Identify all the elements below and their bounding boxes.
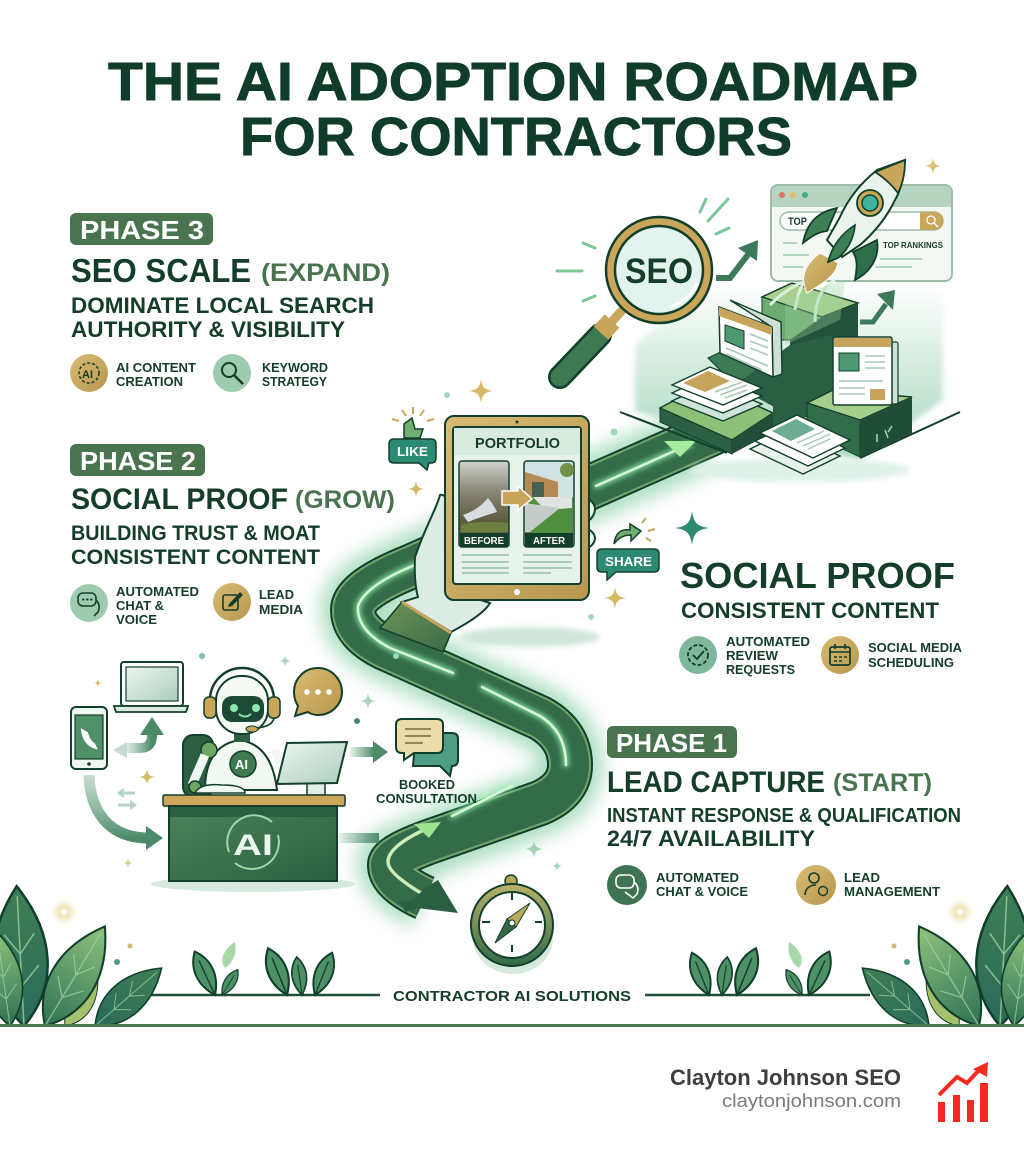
- label: automated review requests: AUTOMATED: [726, 634, 810, 649]
- panel: social proof text: [680, 555, 955, 623]
- label: AI content creation: CREATION: [116, 374, 183, 389]
- label: automated review requests: [726, 634, 810, 677]
- bottom divider band: [0, 1024, 1024, 1027]
- label: automated chat and voice: CHAT &: [116, 598, 164, 613]
- icon: SEO magnifying glass: [560, 217, 712, 377]
- arrow: phone to desk: [89, 775, 163, 850]
- footer: brand text: claytonjohnson.com: [722, 1090, 901, 1111]
- icon: like bubble: [389, 407, 436, 470]
- panel: phase 3 text: DOMINATE LOCAL SEARCH: [71, 293, 374, 318]
- label: AI content creation: [116, 360, 196, 389]
- arrow: growth arrow right: [860, 290, 895, 322]
- arrow: desk to road: [339, 833, 379, 843]
- icon: browser window with top rankings: TOP RANKINGS: [883, 240, 943, 250]
- label: automated chat and voice: [116, 584, 199, 627]
- label: automated chat and voice: AUTOMATED: [116, 584, 199, 599]
- arrow: small exchange arrows: [117, 788, 137, 810]
- panel: phase 3 text: PHASE 3: [80, 215, 204, 245]
- leaves left: [0, 885, 173, 1039]
- icon: gold sparkles near tablet: [408, 379, 626, 609]
- icon: portfolio hand: [402, 495, 595, 632]
- label: contractor AI solutions: CONTRACTOR AI SOLUTIONS: [393, 988, 631, 1005]
- icon: browser window with top rankings: TOP: [788, 216, 807, 228]
- label: lead management: LEAD: [844, 870, 880, 885]
- footer: red chart logo: [938, 1062, 988, 1122]
- decorative robot sparkles: [94, 653, 376, 868]
- panel: social proof text: CONSISTENT CONTENT: [681, 598, 940, 623]
- title: [108, 52, 918, 167]
- icon: sparkle top right: [925, 158, 941, 174]
- label: booked consultation: BOOKED: [399, 777, 455, 792]
- panel: SEO isometric staircase: [620, 283, 960, 482]
- after photo: [524, 461, 574, 547]
- icon: consultation chat bubbles: [396, 719, 458, 776]
- icon: paper stack left: [672, 367, 762, 421]
- panel: phase 3 text: [70, 213, 390, 342]
- panel: phase 1 text: [607, 726, 961, 851]
- icon: gold speech bubble: [294, 668, 342, 716]
- panel: social proof text: SOCIAL PROOF: [680, 555, 955, 596]
- title: THE AI ADOPTION ROADMAP: [108, 52, 918, 112]
- label: lead media: MEDIA: [259, 602, 304, 617]
- panel: portfolio tablet: [445, 416, 600, 647]
- icon: paper stack right: [750, 415, 850, 474]
- label: lead media: [259, 587, 304, 617]
- panel: phase 1 text: PHASE 1: [616, 728, 727, 758]
- icon: share bubble: SHARE: [605, 555, 652, 569]
- footer: brand text: Clayton Johnson SEO: [670, 1065, 901, 1090]
- robot head: [204, 668, 280, 734]
- label: keyword strategy: STRATEGY: [262, 374, 327, 389]
- road path winding from compass to SEO: [353, 432, 715, 898]
- panel: phase 2 text: BUILDING TRUST & MOAT: [71, 522, 320, 545]
- panel: phase 1 text: INSTANT RESPONSE & QUALIFICATION: [607, 805, 961, 827]
- label: automated review requests: REQUESTS: [726, 662, 795, 677]
- label: lead management: [844, 870, 940, 899]
- decorative rays around magnifier: [557, 199, 729, 301]
- icon: sparkles near compass: [525, 840, 562, 871]
- panel: phase 2 text: PHASE 2: [80, 446, 196, 476]
- icon: sparkle above social proof: [675, 511, 709, 545]
- icon: SEO magnifying glass: SEO: [625, 252, 693, 291]
- icon: like bubble: LIKE: [397, 444, 428, 459]
- icon: sleeve: [380, 602, 451, 652]
- label: AI content creation: AI CONTENT: [116, 360, 196, 375]
- panel: phase 2 text: [70, 444, 395, 569]
- label: booked consultation: CONSULTATION: [376, 791, 477, 806]
- panel: AI receptionist desk: AI: [235, 757, 248, 772]
- before photo: BEFORE: [464, 535, 504, 547]
- icon: rocket: [770, 160, 905, 345]
- label: automated chat and voice start: CHAT & VOICE: [656, 884, 748, 899]
- icon: laptop: [114, 662, 188, 712]
- icon: automated chat and voice start: [607, 865, 647, 905]
- panel: phase 3 text: (EXPAND): [261, 259, 390, 287]
- leaves right: [851, 885, 1024, 1039]
- label: automated chat and voice start: [656, 870, 748, 899]
- footer mask below band: [0, 1027, 1024, 1035]
- label: booked consultation: [376, 777, 477, 806]
- icon: lead management: [796, 865, 836, 905]
- icon: social media scheduling: [821, 636, 859, 674]
- panel: phase 3 text: SEO SCALE: [71, 252, 251, 289]
- after photo: AFTER: [533, 535, 565, 547]
- label: automated chat and voice: VOICE: [116, 612, 157, 627]
- panel: foliage and ground: [0, 885, 1024, 1039]
- label: social media scheduling: SCHEDULING: [868, 655, 954, 670]
- panel: AI receptionist desk: AI: [233, 829, 273, 862]
- panel: phase 1 text: 24/7 AVAILABILITY: [607, 826, 815, 851]
- panel: phase 2 text: (GROW): [295, 486, 395, 514]
- icon: phone: [71, 707, 107, 769]
- arrow: road arrowhead at compass: [398, 880, 458, 913]
- footer: brand text: [670, 1065, 901, 1111]
- label: lead media: LEAD: [259, 587, 294, 602]
- label: automated review requests: REVIEW: [726, 648, 779, 663]
- arrow: light inner arrow on road: [414, 822, 441, 838]
- icon: keyword strategy: [213, 354, 251, 392]
- icon: AI content creation: [70, 354, 108, 392]
- icon: upright document left: [719, 300, 782, 377]
- icon: AI content creation: AI: [82, 369, 93, 381]
- arrow: before to after: [502, 486, 532, 510]
- sprouts right: [684, 942, 837, 999]
- arrow: monitor to consultation: [350, 741, 388, 763]
- icon: automated chat and voice: [70, 584, 108, 622]
- label: social media scheduling: [868, 640, 963, 670]
- panel: phase 1 text: LEAD CAPTURE: [607, 766, 825, 799]
- label: keyword strategy: KEYWORD: [262, 360, 328, 375]
- monitor: [277, 742, 347, 795]
- decorative dots: [393, 392, 618, 659]
- panel: AI receptionist desk: [151, 668, 355, 892]
- before photo: [459, 461, 509, 547]
- icon: upright document right: [833, 337, 898, 405]
- label: automated chat and voice start: AUTOMATED: [656, 870, 739, 885]
- arrow: phone to laptop: [113, 717, 164, 758]
- icon: browser window with top rankings: [771, 185, 952, 281]
- label: lead management: MANAGEMENT: [844, 884, 940, 899]
- sprouts left: [187, 942, 340, 999]
- icon: lead media: [213, 583, 251, 621]
- icon: automated review requests: [679, 636, 717, 674]
- arrow: light green arrow at top of road: [664, 441, 696, 457]
- panel: portfolio tablet: PORTFOLIO: [475, 435, 560, 452]
- panel: phase 3 text: AUTHORITY & VISIBILITY: [71, 317, 345, 342]
- panel: phase 2 text: SOCIAL PROOF: [71, 483, 288, 516]
- arrow: growth arrow from SEO: [716, 240, 758, 278]
- label: social media scheduling: SOCIAL MEDIA: [868, 640, 963, 655]
- label: keyword strategy: [262, 360, 328, 389]
- panel: phase 2 text: CONSISTENT CONTENT: [71, 546, 320, 569]
- panel: phase 1 text: (START): [833, 769, 932, 797]
- icon: share bubble: [597, 518, 659, 580]
- icon: compass: [471, 875, 553, 974]
- title: FOR CONTRACTORS: [240, 107, 792, 167]
